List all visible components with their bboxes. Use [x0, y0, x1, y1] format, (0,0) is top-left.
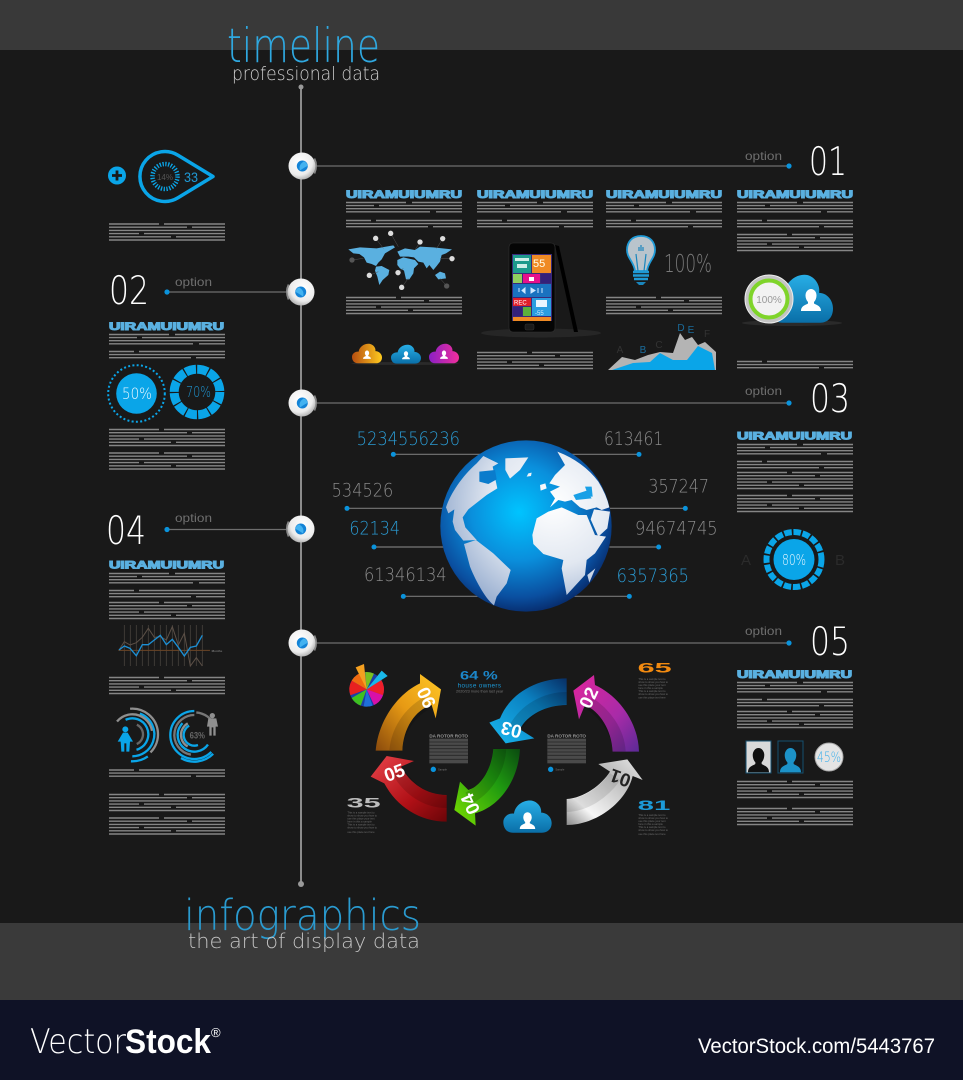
option connector 02: option — [175, 275, 212, 289]
center text block left: DA ROTOR ROTO — [429, 733, 469, 738]
callout 81: This is a sample text to — [638, 825, 666, 829]
callout 35: use this place text here — [347, 830, 375, 834]
pie chart — [349, 664, 388, 707]
number labels: 94674745 — [635, 519, 718, 540]
area chart: D — [677, 323, 685, 334]
arrow 06 — [376, 674, 441, 751]
callout 64%: house owners — [458, 682, 501, 689]
panel: section 05 text and portraits — [737, 669, 853, 824]
bottom band — [0, 923, 963, 1000]
callout 35: This is a sample text to — [347, 810, 375, 814]
option connector 03 — [316, 377, 850, 422]
top band — [0, 0, 963, 50]
callout 65: This is a sample text to — [638, 677, 666, 681]
timeline axis — [298, 84, 304, 887]
panel: section 04 text and charts — [95, 560, 232, 834]
gauge 50%: 50% — [122, 384, 152, 403]
area chart: B — [640, 345, 647, 356]
callout 65: use this place text here — [638, 696, 666, 700]
callout 81: show to show you how to — [638, 816, 669, 820]
line chart — [118, 625, 223, 666]
arrow 05: 05 — [381, 759, 408, 786]
panel: column 4 cloud badge: UIRAMUIUMRU — [737, 189, 853, 201]
text block under teardrop — [109, 224, 225, 240]
center text block right — [547, 733, 587, 772]
world map — [348, 231, 455, 290]
footer logo: ® — [211, 1025, 221, 1040]
callout 81: 81 — [638, 797, 671, 813]
arrow 05 — [371, 756, 447, 822]
callout 35: use this place your text — [347, 816, 375, 820]
gauge 50% — [108, 365, 165, 422]
callout 65: 65 — [638, 660, 672, 676]
badge 45% — [815, 743, 843, 771]
area chart: E — [688, 325, 695, 336]
continents — [446, 452, 610, 605]
panel: column 1 world map — [346, 189, 462, 365]
number labels: 534526 — [332, 481, 393, 502]
callout 81: use this place your text — [638, 819, 666, 823]
option connector 03: 03 — [810, 377, 850, 422]
callout 35: show to show you how to — [347, 825, 378, 829]
callout 65: use this place your text — [638, 683, 666, 687]
callout 81 — [638, 797, 671, 836]
center text block right: DA ROTOR ROTO — [547, 733, 587, 738]
option connector 02 — [109, 269, 287, 314]
icon: cloud with 100% badge: 100% — [756, 295, 782, 306]
globe sphere — [440, 440, 612, 612]
callout 64%: 2020/23 more than last year — [456, 690, 504, 694]
arrow 01: 01 — [607, 765, 633, 792]
option connector 03: option — [745, 384, 782, 398]
panel: column 3 bulb and area chart — [606, 189, 722, 370]
option connector 02: 02 — [109, 269, 149, 314]
icon: smartphone: 55 — [533, 258, 545, 270]
footer logo: Vector — [30, 1022, 126, 1062]
number labels: 5234556236 — [357, 429, 460, 450]
circular arrows diagram — [347, 660, 672, 836]
option connector 01: 01 — [809, 140, 847, 185]
icon: portrait blue — [778, 741, 803, 773]
number labels: 6357365 — [617, 566, 689, 587]
panel: column 1 world map: UIRAMUIUMRU — [346, 189, 462, 201]
center text block left: Sample — [438, 767, 448, 771]
callout 81: show to show you how to — [638, 828, 669, 832]
area chart: A — [617, 345, 624, 356]
leader lines — [347, 454, 685, 596]
radial chart woman — [95, 697, 170, 772]
arrow 03: 03 — [499, 717, 524, 743]
callout 81: here in this a sample — [638, 822, 663, 826]
line chart: Months — [212, 649, 223, 653]
number labels: 61346134 — [364, 565, 447, 586]
icons: three clouds — [351, 344, 459, 365]
footer url: VectorStock.com/5443767 — [698, 1035, 935, 1058]
arrow 06: 06 — [413, 684, 440, 712]
gauge 80%: A — [741, 552, 751, 569]
center text block right: Sample — [555, 767, 565, 771]
arrow 03 — [489, 678, 567, 743]
arrow 04 — [454, 749, 520, 826]
panel: section 02 text and gauges — [108, 321, 225, 469]
icon: smartphone: -55 — [535, 311, 544, 317]
badge 45%: 45% — [817, 750, 841, 766]
label: 100%: 100% — [664, 249, 712, 278]
option connector 05 — [316, 620, 850, 665]
callout 65: show to show you how to — [638, 692, 669, 696]
option connector 04: 04 — [106, 509, 146, 554]
callout 65: here in this a sample — [638, 686, 663, 690]
callout 81: This is a sample text to — [638, 813, 666, 817]
callout 35: 35 — [347, 795, 381, 811]
option connector 05: option — [745, 624, 782, 638]
arrow 04: 04 — [456, 790, 484, 818]
icon: teardrop gauge — [140, 152, 213, 202]
callout 35: show to show you how to — [347, 813, 378, 817]
panel: column 3 bulb and area chart: UIRAMUIUMRU — [606, 189, 722, 201]
icon: teardrop gauge: 33 — [184, 169, 198, 185]
icon: cloud with 100% badge — [742, 275, 842, 326]
arrow 01 — [567, 759, 643, 825]
arrow 02 — [573, 675, 639, 752]
option connector 01: option — [745, 149, 782, 163]
callout 64% — [456, 668, 504, 694]
radial chart man: 63% — [190, 731, 206, 741]
callout 35: This is a sample text to — [347, 822, 375, 826]
callout 65: This is a sample text to — [638, 689, 666, 693]
panel: section 05 text and portraits: UIRAMUIUMRU — [737, 669, 852, 681]
title: infographics: infographics — [184, 891, 421, 941]
number labels — [332, 429, 718, 587]
icon: smartphone — [481, 243, 601, 338]
title: timeline: timeline — [227, 19, 380, 74]
number labels: 613461 — [604, 429, 663, 450]
icon: teardrop gauge: 14% — [157, 173, 173, 182]
area chart — [608, 323, 716, 370]
icon: light bulb — [627, 236, 655, 285]
arrow 02: 02 — [575, 684, 602, 712]
footer logo: Stock — [125, 1023, 211, 1061]
callout 65 — [638, 660, 672, 700]
icon: smartphone: REC — [514, 300, 527, 306]
footer bar — [0, 1000, 963, 1080]
timeline nodes — [287, 152, 316, 656]
title: timeline: professional data — [232, 63, 380, 85]
callout 35 — [347, 795, 381, 834]
center text block left — [429, 733, 469, 772]
panel: section 03 text and gauge — [737, 430, 853, 587]
number labels: 357247 — [648, 476, 709, 497]
panel: section 02 text and gauges: UIRAMUIUMRU — [109, 321, 224, 333]
callout 65: show to show you how to — [638, 680, 669, 684]
gauge 80%: B — [835, 552, 845, 569]
radial chart man — [157, 697, 232, 773]
icon: plus button — [108, 166, 126, 184]
callout 81: use this place text here — [638, 832, 666, 836]
callout 64%: 64 % — [460, 668, 498, 682]
gauge 80% — [741, 532, 845, 587]
icon: portrait white — [746, 741, 771, 773]
title: infographics: the art of display data — [188, 929, 420, 953]
gauge 80%: 80% — [782, 551, 806, 569]
cloud icon — [503, 801, 552, 833]
title: timeline — [227, 19, 380, 85]
callout 35: here in this a sample — [347, 819, 372, 823]
leader dots — [344, 452, 688, 599]
panel: section 03 text and gauge: UIRAMUIUMRU — [737, 430, 852, 442]
panel: column 2 smartphone — [477, 189, 601, 368]
footer logo — [30, 1022, 221, 1062]
option connector 05: 05 — [810, 620, 850, 665]
area chart: C — [655, 340, 663, 351]
panel: column 2 smartphone: UIRAMUIUMRU — [477, 189, 593, 201]
panel: column 4 cloud badge — [737, 189, 853, 368]
area chart: F — [704, 329, 710, 340]
option connector 04 — [106, 509, 287, 554]
gauge 70% — [174, 369, 220, 415]
panel: section 04 text and charts: UIRAMUIUMRU — [109, 560, 224, 572]
option connector 04: option — [175, 511, 212, 525]
option connector 01 — [316, 140, 847, 185]
gauge 70%: 70% — [186, 383, 211, 401]
number labels: 62134 — [349, 519, 400, 540]
globe with data labels — [332, 429, 718, 612]
